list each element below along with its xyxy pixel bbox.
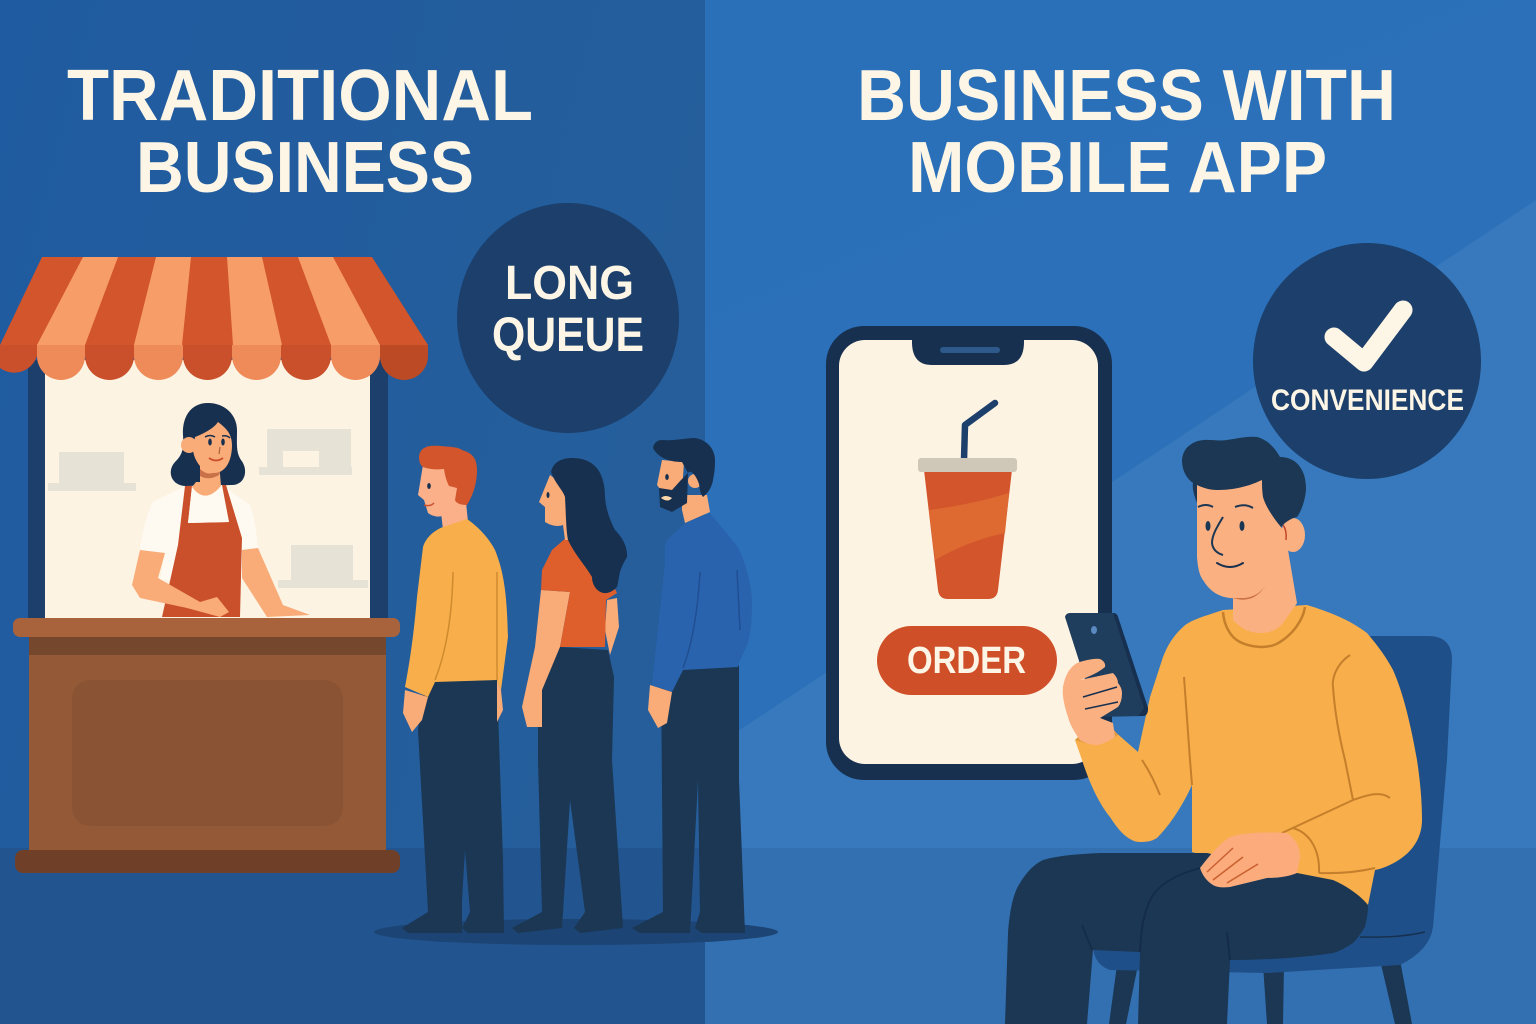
title: business with mobile app (857, 56, 1396, 208)
sweater fold lines (1142, 655, 1390, 873)
arms (132, 550, 229, 617)
panel: mobile app background (705, 0, 1536, 1024)
title: business with mobile app: BUSINESS WITH (857, 56, 1396, 136)
title: business with mobile app: MOBILE APP (908, 128, 1327, 208)
ground shadow (374, 919, 778, 945)
callout: convenience (1253, 243, 1481, 479)
callout: long queue: QUEUE (492, 309, 644, 362)
queue of customers (374, 438, 778, 945)
customer 2: woman, orange top (512, 458, 627, 933)
icon: check mark (1334, 310, 1403, 362)
yellow sweater (1075, 605, 1422, 905)
white shirt (140, 485, 258, 580)
callout: convenience: CONVENIENCE (1271, 384, 1464, 417)
customer 1: orange hair, yellow sweater (402, 446, 508, 933)
callout: long queue: LONG (505, 257, 634, 310)
chair (1093, 636, 1452, 1024)
title: traditional business: BUSINESS (136, 128, 474, 208)
striped awning (0, 257, 428, 380)
vendor (132, 403, 310, 617)
callout: long queue (457, 203, 679, 433)
hair (171, 403, 245, 486)
icon: drink cup (918, 403, 1017, 599)
legs (1005, 853, 1368, 1024)
resting hand (1200, 832, 1300, 887)
order button (877, 626, 1057, 695)
stall posts and window (28, 360, 388, 622)
seated man using phone (1005, 437, 1452, 1024)
wooden counter (13, 618, 400, 873)
title: traditional business: TRADITIONAL (67, 56, 533, 136)
handheld phone and hand (1063, 613, 1148, 745)
customer 3: bearded man, blue sweater (632, 438, 752, 933)
panel: traditional business background (0, 0, 705, 1024)
market stall (0, 257, 428, 873)
neck and face (181, 422, 232, 496)
neck and collar (1223, 550, 1305, 647)
title: traditional business (67, 56, 533, 208)
phone with order screen (826, 326, 1112, 780)
head (1182, 437, 1306, 600)
apron (162, 485, 242, 617)
order button: ORDER (907, 640, 1026, 682)
